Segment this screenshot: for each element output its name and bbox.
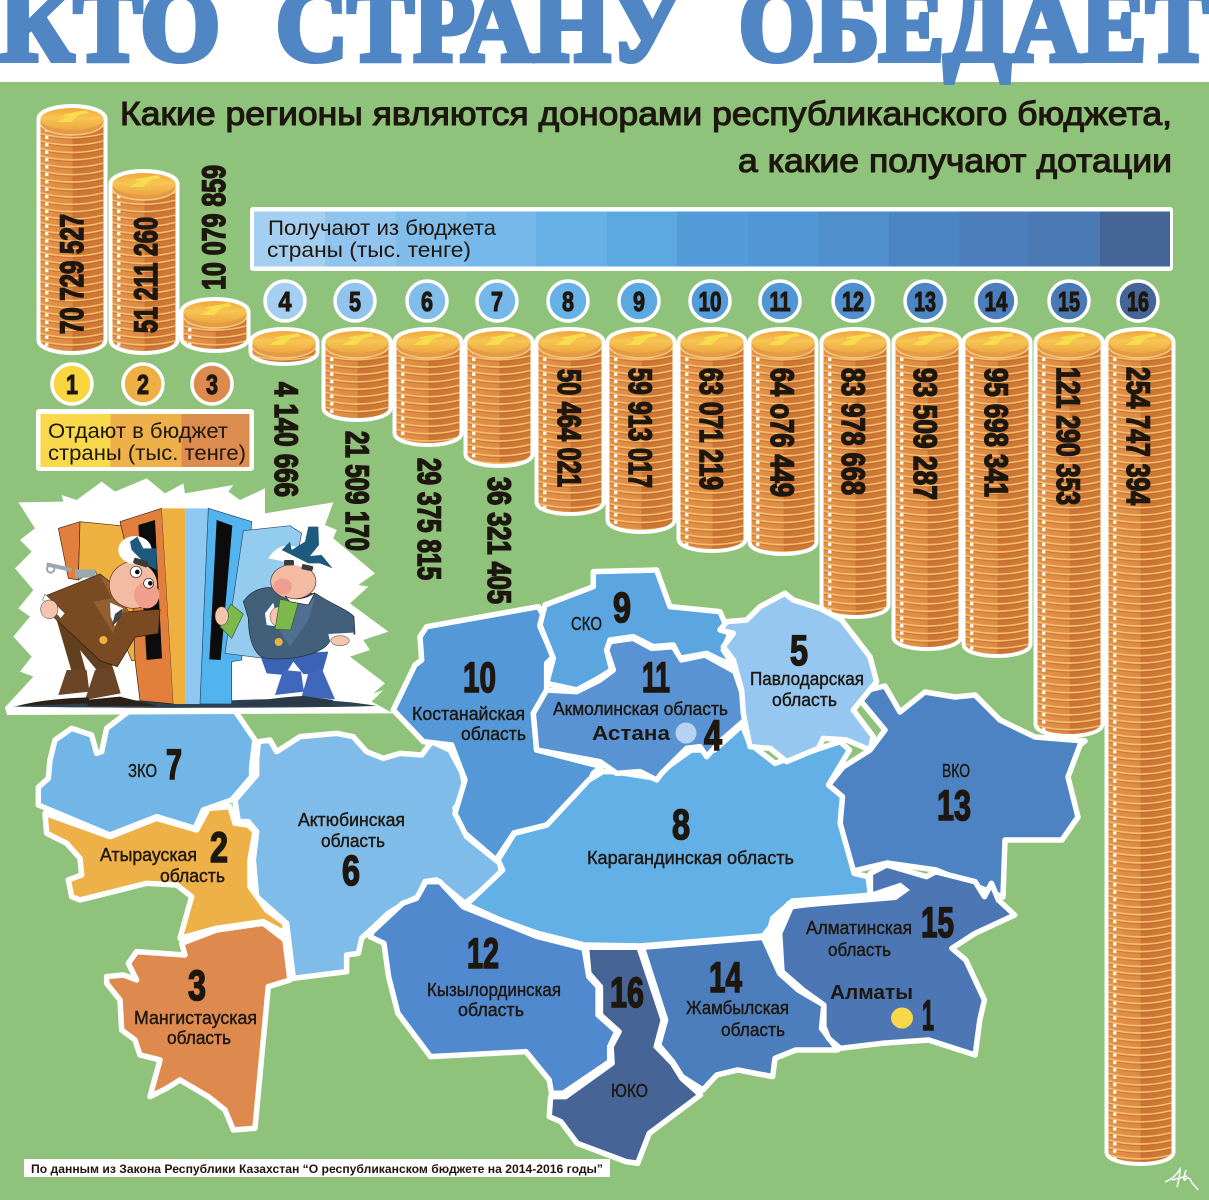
- map labels: Атырауская: [100, 845, 197, 865]
- circle numbers: 16: [1127, 286, 1149, 317]
- circle numbers: 12: [842, 286, 864, 317]
- circle numbers: 6: [421, 286, 433, 317]
- map labels: 13: [937, 782, 971, 830]
- map labels: 6: [342, 847, 360, 895]
- region 5 Павлодарская: [720, 593, 877, 762]
- circle numbers: 9: [633, 286, 645, 317]
- legend bar: give to budget: страны (тыс. тенге): [48, 442, 246, 465]
- map labels: 2: [210, 824, 228, 872]
- map labels: 10: [463, 654, 496, 702]
- region 11 Акмолинская: [533, 638, 748, 780]
- map labels: 5: [790, 627, 808, 675]
- region 3 Мангистауская: [107, 923, 290, 1130]
- circle numbers: 15: [1058, 286, 1080, 317]
- map labels: область: [772, 690, 837, 710]
- map of Kazakhstan: [38, 570, 1085, 1163]
- legend bar: give to budget: [36, 409, 254, 471]
- vault light blue strip: [185, 508, 208, 704]
- map labels: область: [461, 724, 526, 744]
- coin stack 5: [326, 331, 388, 418]
- stack values: 50 464 021: [551, 369, 587, 487]
- circle numbers: 11: [770, 286, 790, 317]
- region 6 Актюбинская: [235, 733, 502, 978]
- region 10 Костанайская: [393, 607, 602, 860]
- map labels: область: [458, 1000, 524, 1020]
- map labels: область: [160, 866, 225, 886]
- vault yellow strip: [162, 508, 185, 704]
- map labels: ЮКО: [611, 1081, 648, 1101]
- circle numbers: 8: [562, 286, 574, 317]
- coin stack 16: [1108, 331, 1172, 1162]
- coin stack 2: [112, 173, 176, 351]
- coin stack 8: [538, 331, 602, 512]
- map labels: Кызылординская: [427, 980, 561, 1000]
- left door: [47, 522, 147, 661]
- coin stack 13: [896, 331, 958, 647]
- circle numbers: 2: [137, 369, 149, 400]
- circle numbers: 3: [206, 369, 218, 400]
- map labels: Карагандинская область: [587, 848, 794, 868]
- subtitle: а какие получают дотации: [738, 142, 1172, 179]
- legend bar: receive from budget: страны (тыс. тенге): [267, 239, 471, 262]
- stack values: 70 729 527: [54, 214, 90, 334]
- coin stack 12: [824, 331, 886, 615]
- legend bar: give to budget: Отдают в бюджет: [48, 420, 228, 443]
- stack values: 21 509 170: [339, 431, 375, 551]
- subtitle: Какие регионы являются донорами республиканского бюджета,: [120, 95, 1172, 132]
- map labels: Павлодарская: [750, 669, 864, 689]
- map labels: 1: [922, 992, 934, 1040]
- region 7 ЗКО: [38, 708, 255, 835]
- coin stack 3: [184, 301, 246, 349]
- ground shadow: [13, 699, 377, 708]
- map labels: Костанайская: [412, 704, 525, 724]
- region 2 Атырауская: [45, 807, 285, 938]
- map labels: 14: [709, 954, 742, 1002]
- map labels: область: [721, 1020, 785, 1040]
- map labels: Жамбылская: [686, 998, 789, 1018]
- cartoon: two officials at a vault: [5, 478, 393, 715]
- stack values: 29 375 815: [411, 458, 447, 580]
- region 9 СКО: [540, 570, 733, 690]
- circle numbers: [66, 286, 1149, 400]
- map labels: 16: [610, 969, 644, 1017]
- map labels: СКО: [571, 614, 602, 634]
- coin stack 6: [396, 331, 460, 443]
- stack values: 254 747 394: [1120, 367, 1156, 505]
- stack values: 95 698 341: [978, 368, 1014, 497]
- artist signature: [1165, 1169, 1198, 1190]
- coin stack 14: [966, 331, 1028, 654]
- coin stack 1: [40, 108, 104, 351]
- coin stack 11: [752, 331, 814, 552]
- map labels: Актюбинская: [298, 810, 405, 830]
- map labels: 12: [467, 930, 499, 978]
- city marker Almaty: [891, 1008, 913, 1028]
- stack values: 93 509 287: [907, 368, 943, 500]
- vault orange side: [120, 508, 173, 704]
- map labels: Алматинская: [806, 918, 912, 938]
- circle numbers: 5: [349, 286, 361, 317]
- map labels: область: [321, 831, 385, 851]
- legend bar: receive from budget: [250, 207, 1173, 271]
- starburst: [5, 478, 393, 715]
- stack values: 51 211 260: [128, 217, 164, 333]
- map labels: область: [167, 1028, 231, 1048]
- right door: [225, 526, 302, 660]
- title: [0, 0, 1209, 83]
- left man: [17, 536, 160, 706]
- stack values: 83 978 668: [835, 368, 871, 495]
- map white strip: [763, 883, 910, 967]
- map labels: 7: [166, 741, 182, 789]
- circle numbers: 13: [914, 286, 936, 317]
- map labels: 8: [672, 801, 690, 849]
- vault blue side: [200, 508, 252, 704]
- map labels: 3: [188, 962, 206, 1010]
- region 14 Жамбылская: [642, 937, 838, 1090]
- map labels: 4: [704, 712, 722, 760]
- circle numbers: 10: [698, 286, 722, 317]
- circle numbers: 14: [984, 286, 1008, 317]
- map labels: ЗКО: [128, 761, 157, 781]
- map labels: [100, 584, 971, 1101]
- coin stack 7: [468, 331, 530, 464]
- legend bar: receive from budget: Получают из бюджета: [268, 217, 496, 240]
- map labels: ВКО: [942, 761, 970, 781]
- map labels: 9: [613, 584, 631, 632]
- circle numbers: 7: [491, 286, 503, 317]
- map labels: область: [828, 940, 891, 960]
- stack values: 36 321 405: [481, 477, 517, 604]
- stack values: 63 071 219: [693, 368, 729, 490]
- numbered circles: [52, 281, 1158, 404]
- source note: По данным из Закона Республики Казахстан “О республиканском бюджете на 2014-2016 годы”: [31, 1162, 603, 1176]
- region 12 Кызылординская: [370, 882, 617, 1093]
- map labels: 15: [921, 899, 954, 947]
- stack values: [54, 165, 1156, 604]
- region 8 Карагандинская: [463, 725, 870, 946]
- map labels: Астана: [592, 723, 671, 745]
- circle numbers: 4: [278, 286, 292, 317]
- region 15 Алматинская: [780, 865, 1015, 1055]
- region 13 ВКО: [827, 686, 1085, 897]
- vault blue opening: [209, 520, 232, 660]
- stack values: 64 о76 449: [764, 368, 800, 497]
- map labels: 11: [642, 654, 670, 702]
- stack values: 121 290 353: [1050, 367, 1086, 505]
- coin stack 9: [610, 331, 672, 530]
- subtitle: [120, 95, 1172, 179]
- vault orange opening: [138, 520, 162, 660]
- right man: [215, 525, 355, 706]
- stack values: 10 079 859: [196, 165, 232, 290]
- coin stack 4: [252, 331, 316, 362]
- region 16 ЮКО: [549, 947, 701, 1163]
- map labels: Акмолинская область: [553, 699, 728, 719]
- coin stack 10: [680, 331, 744, 549]
- stack values: 59 913 017: [622, 368, 658, 488]
- coin stack 15: [1038, 331, 1100, 734]
- map labels: Мангистауская: [134, 1008, 257, 1028]
- city marker Astana: [676, 722, 696, 744]
- map labels: Алматы: [830, 982, 913, 1004]
- circle numbers: 1: [66, 369, 78, 400]
- stack values: 4 140 666: [268, 382, 304, 497]
